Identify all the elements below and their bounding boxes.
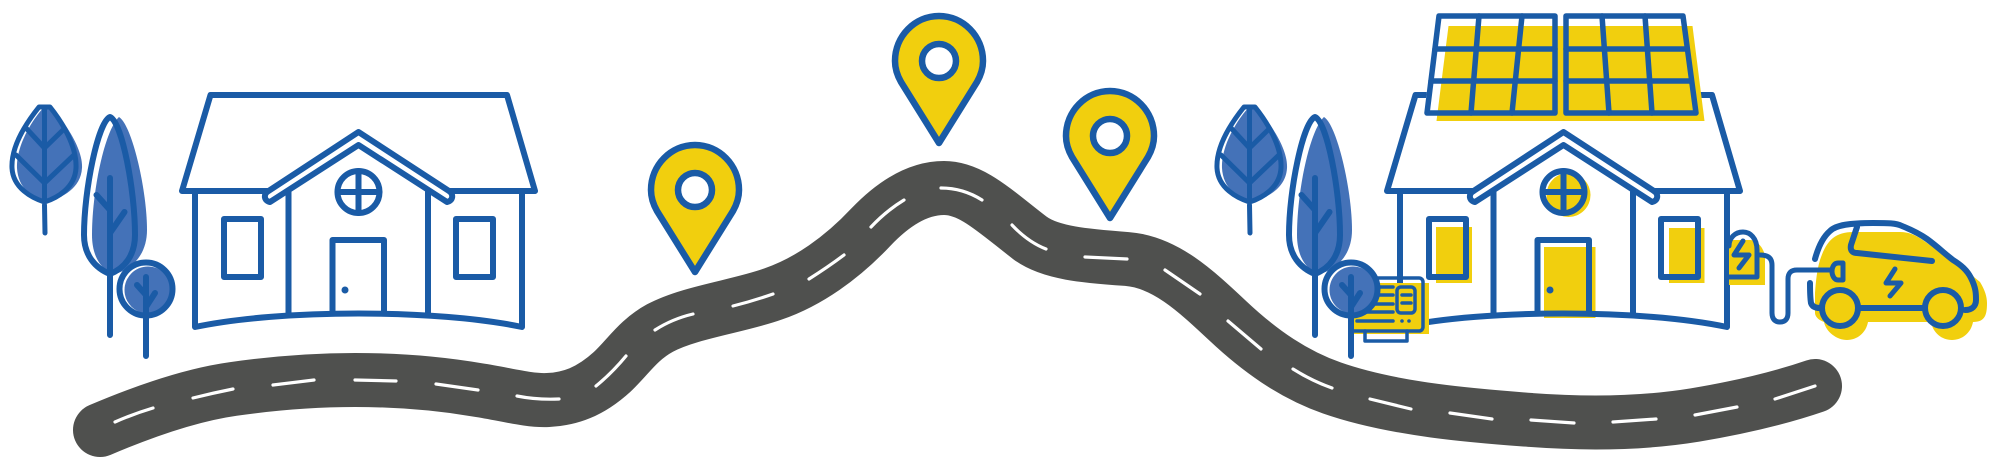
heat pump unit <box>1350 278 1429 341</box>
electric car <box>1810 223 1987 340</box>
solar home <box>1387 13 1740 327</box>
left house <box>182 95 535 327</box>
round tree <box>120 262 172 356</box>
EV charger <box>1729 232 1765 285</box>
charging cable and plug <box>1760 255 1843 322</box>
right window <box>456 219 493 277</box>
icon: car bolt <box>1886 269 1901 296</box>
roof <box>182 95 535 191</box>
tall tree <box>84 117 147 335</box>
round window <box>338 171 380 213</box>
leaf tree <box>1217 107 1287 233</box>
tall tree <box>1289 117 1352 335</box>
left trees <box>12 107 172 356</box>
left window <box>224 219 261 277</box>
icon: charger bolt <box>1734 241 1749 268</box>
location pin left <box>651 145 739 272</box>
house outline <box>1387 95 1740 327</box>
walls <box>195 191 522 327</box>
house yellow accents <box>1436 173 1704 318</box>
road <box>100 188 1815 430</box>
road centre line dashes <box>115 188 1815 423</box>
gable <box>265 132 452 202</box>
door knob <box>342 286 348 294</box>
round tree <box>1324 262 1378 356</box>
car wheels <box>1822 290 1858 326</box>
location pin centre <box>895 16 983 143</box>
gable posts <box>288 192 428 313</box>
car window <box>1851 227 1932 261</box>
solar panels <box>1424 13 1704 121</box>
door <box>332 240 384 312</box>
right trees <box>1217 107 1378 356</box>
location pin right <box>1066 91 1154 218</box>
leaf tree <box>12 107 82 233</box>
